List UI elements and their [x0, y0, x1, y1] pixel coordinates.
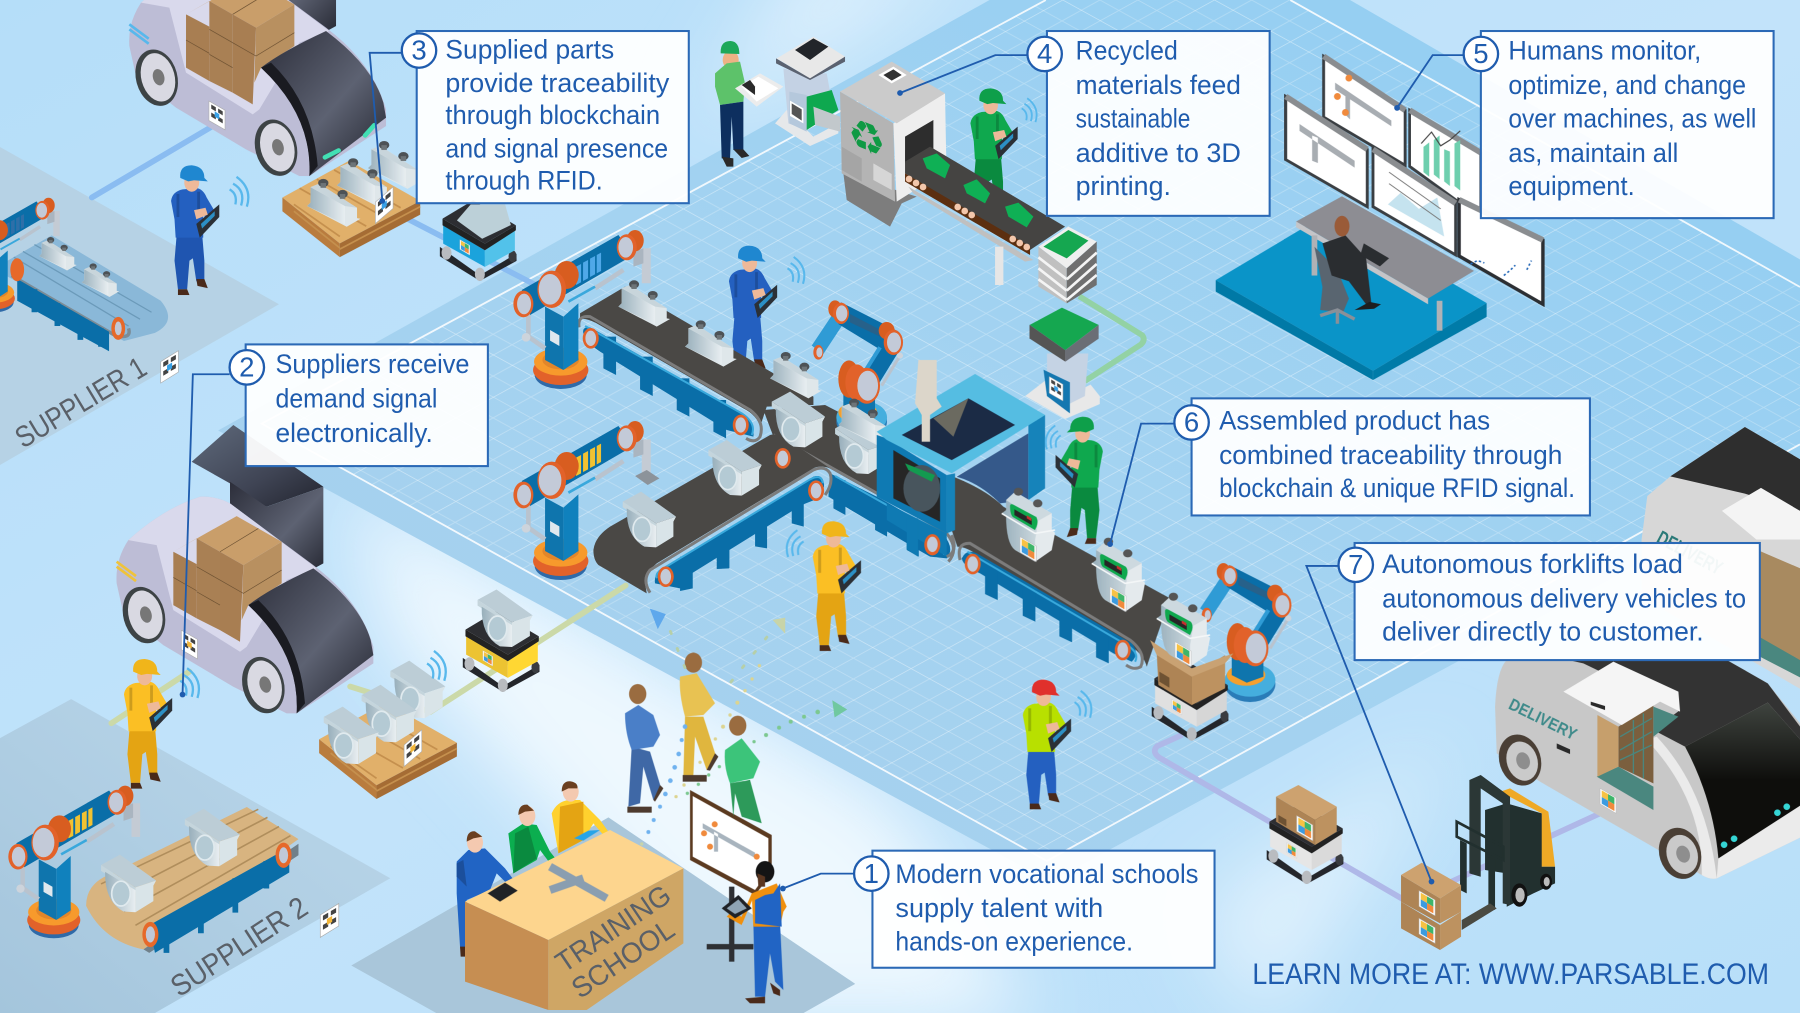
flow line: green recycled route [1079, 296, 1144, 381]
supplier 1 worker [171, 165, 219, 295]
material feeder [775, 37, 845, 146]
leader line 5 [1394, 55, 1465, 111]
training school text: SCHOOL [566, 913, 681, 1005]
callout 5 text: Humans monitor, [1508, 36, 1701, 66]
supplier 2 tag [320, 893, 339, 948]
rear van label: DELIVERY [1653, 527, 1726, 580]
training area [457, 653, 820, 1010]
callout 1 [854, 851, 1215, 968]
teacher [722, 861, 787, 1003]
callout 7 text [1382, 549, 1746, 647]
wifi operator 1 [788, 257, 804, 284]
conveyor 3 [952, 477, 1170, 668]
callout 3 text: Supplied parts [445, 35, 614, 65]
central junction belt [763, 405, 954, 562]
leader line 3 [370, 53, 402, 204]
callout 6 text: blockchain & unique RFID signal. [1219, 473, 1575, 503]
supplier 2 robot arm [8, 786, 140, 938]
delivery truck top [129, 0, 386, 181]
wifi yellow [787, 530, 804, 557]
AGV with open box [1150, 640, 1233, 741]
assembly machine [877, 360, 1045, 557]
leader line 6 [1107, 424, 1176, 547]
robot arm packing [1200, 563, 1291, 702]
control platform [1216, 212, 1487, 380]
callout 2 [230, 344, 488, 466]
leader line 2 [180, 374, 230, 697]
callout 4 text: printing. [1076, 171, 1171, 201]
callout 4 text [1076, 36, 1241, 201]
callout 1 text: hands-on experience. [895, 927, 1133, 957]
leader line 7 [1306, 566, 1434, 885]
worker: assembly operator [1056, 417, 1103, 544]
callout 1 text [895, 859, 1198, 957]
light glow along the floor edges [344, 0, 1458, 1013]
callout 6 [1174, 398, 1590, 515]
callout 6: 6 [1184, 407, 1199, 438]
supplier 2 conveyor [86, 807, 298, 953]
wifi red hat [1074, 691, 1091, 718]
parts on conveyors [618, 280, 890, 547]
training school text: TRAINING [550, 879, 677, 979]
pallet 2 [319, 703, 457, 799]
supplier 2 label: SUPPLIER 2 [165, 891, 314, 1003]
pallet 1 parts [307, 141, 421, 227]
forklift [1457, 775, 1555, 930]
callout 7 text: autonomous delivery vehicles to [1382, 583, 1746, 613]
wifi signal pallet 2 [427, 651, 446, 681]
recycle machine [840, 62, 947, 227]
mini conveyor model [550, 867, 607, 898]
tablet on desk [488, 883, 518, 902]
recycling conveyor [905, 147, 1065, 285]
wifi signal worker 2 [180, 668, 199, 698]
pallet 1 [282, 161, 420, 257]
callout 2 text: Suppliers receive [276, 349, 470, 379]
callout 5 text: as, maintain all [1508, 138, 1678, 168]
callout 6 text [1219, 405, 1575, 503]
callout 2: 2 [239, 352, 254, 383]
truck top tag [209, 101, 225, 130]
training desk [465, 830, 683, 1010]
callout 4 text: materials feed [1076, 70, 1241, 100]
AGV yellow [463, 611, 539, 692]
supplier 2 worker [124, 659, 172, 789]
conveyor system left [579, 287, 954, 593]
student in green [508, 805, 557, 873]
finished products [1002, 488, 1145, 612]
flow line: blue parts route [92, 126, 540, 287]
monitor: status B [1286, 96, 1367, 207]
callout 1 text: supply talent with [895, 893, 1103, 923]
callout 1: 1 [864, 858, 879, 889]
AGV with box [1267, 785, 1343, 884]
callout 5 [1464, 31, 1774, 218]
robot arm line 2 [513, 421, 659, 580]
callout 7 text: deliver directly to customer. [1382, 617, 1704, 647]
callout 2 text [276, 349, 470, 448]
delivery van rear [1642, 427, 1800, 689]
callout 4 [1027, 31, 1270, 216]
callout 3 text: provide traceability [445, 68, 670, 98]
callout 3 [402, 31, 689, 203]
callout 7: 7 [1348, 549, 1363, 580]
callout 7 text: Autonomous forklifts load [1382, 549, 1683, 579]
callout 6 text: combined traceability through [1219, 440, 1562, 470]
robot arm small top [812, 300, 903, 439]
assembly area [877, 360, 1170, 668]
callout 2 text: demand signal [276, 384, 437, 414]
worker: top green with tray [715, 41, 783, 167]
callout 5 text: optimize, and change [1508, 70, 1746, 100]
monitor: status A [1324, 56, 1405, 165]
monitor: scatter [1459, 200, 1543, 304]
callout 3 text: through blockchain [445, 100, 660, 130]
callout 3 text [445, 35, 670, 195]
callout 3 text: through RFID. [445, 165, 603, 195]
delivery label: DELIVERY [1506, 695, 1580, 744]
floor: supplier 1 [0, 147, 279, 465]
pallet 2 tag [404, 720, 422, 777]
callout 4 text: Recycled [1076, 36, 1178, 66]
supplier 1 label: SUPPLIER 1 [10, 351, 153, 455]
packing station [1150, 563, 1291, 741]
truck mid tag [181, 630, 197, 659]
delivery and forklift area [1267, 660, 1800, 950]
floor: supplier 2 [0, 699, 390, 1013]
worker: line 1 operator [729, 246, 777, 375]
conveyor 1 [579, 287, 813, 441]
delivery van front [1492, 660, 1800, 884]
floor: training school [351, 817, 855, 1013]
callout 5 text: equipment. [1508, 171, 1635, 201]
worker: yellow supervisor [813, 521, 861, 651]
wifi recycling [1022, 98, 1037, 122]
desk operator [1314, 216, 1389, 324]
worker: recycling operator [970, 88, 1018, 216]
robot arm line 1 [513, 230, 651, 389]
recycling station [715, 37, 947, 227]
AGV blue part [457, 204, 511, 239]
product on box [1157, 593, 1210, 667]
desk [1296, 196, 1474, 331]
flow line: purple delivery route [1155, 735, 1601, 901]
callout 5: 5 [1473, 38, 1489, 69]
factory floor [218, 0, 1800, 882]
AGV blue [440, 200, 517, 281]
callout 3 text: and signal presence [445, 133, 668, 163]
callout 6 text: Assembled product has [1219, 405, 1490, 435]
tablet blue on desk [574, 830, 600, 841]
supplier 1 parts [39, 237, 119, 297]
leader line 1 [780, 874, 855, 891]
leader line 4 [897, 55, 1029, 96]
callout 5 text [1508, 36, 1756, 201]
callout 2 text: electronically. [276, 418, 433, 448]
whiteboard [690, 790, 772, 962]
students walking [625, 653, 762, 823]
callout 3: 3 [411, 35, 427, 66]
supplier 1 tag [161, 341, 178, 393]
callout 4: 4 [1037, 38, 1052, 69]
recycled filament printer [1025, 308, 1100, 419]
callout 7 [1339, 543, 1760, 660]
monitor: chart green [1410, 110, 1481, 218]
AGV yellow part [478, 589, 533, 647]
monitor wall [1286, 56, 1543, 304]
callout 4 text: sustainable [1076, 103, 1190, 133]
monitor: chart output [1373, 149, 1456, 255]
truck top lights [325, 125, 374, 157]
supplier 1 robot arm [0, 198, 60, 312]
delivery truck mid [116, 425, 373, 718]
stacked material [1038, 227, 1097, 303]
recycle symbol: ♻ [848, 107, 885, 170]
conveyor 2 [593, 434, 831, 593]
flow line: olive parts route [111, 585, 626, 723]
supplier 1 conveyor [6, 235, 168, 351]
dispersing dots [640, 664, 820, 846]
pallet 2 parts [324, 661, 445, 764]
pallet 1 tag [375, 177, 393, 234]
worker: red hat [1023, 680, 1071, 809]
supplier 2 parts [101, 809, 240, 912]
direction arrows [650, 608, 847, 717]
callout 5 text: over machines, as well [1508, 103, 1756, 133]
wifi assembly [1046, 425, 1061, 449]
callout 1 text: Modern vocational schools [895, 859, 1198, 889]
wifi signal worker 1 [230, 177, 248, 207]
student in blue [457, 831, 515, 957]
callout 4 text: additive to 3D [1076, 138, 1241, 168]
box stack [1401, 863, 1461, 950]
student in yellow [552, 781, 608, 853]
